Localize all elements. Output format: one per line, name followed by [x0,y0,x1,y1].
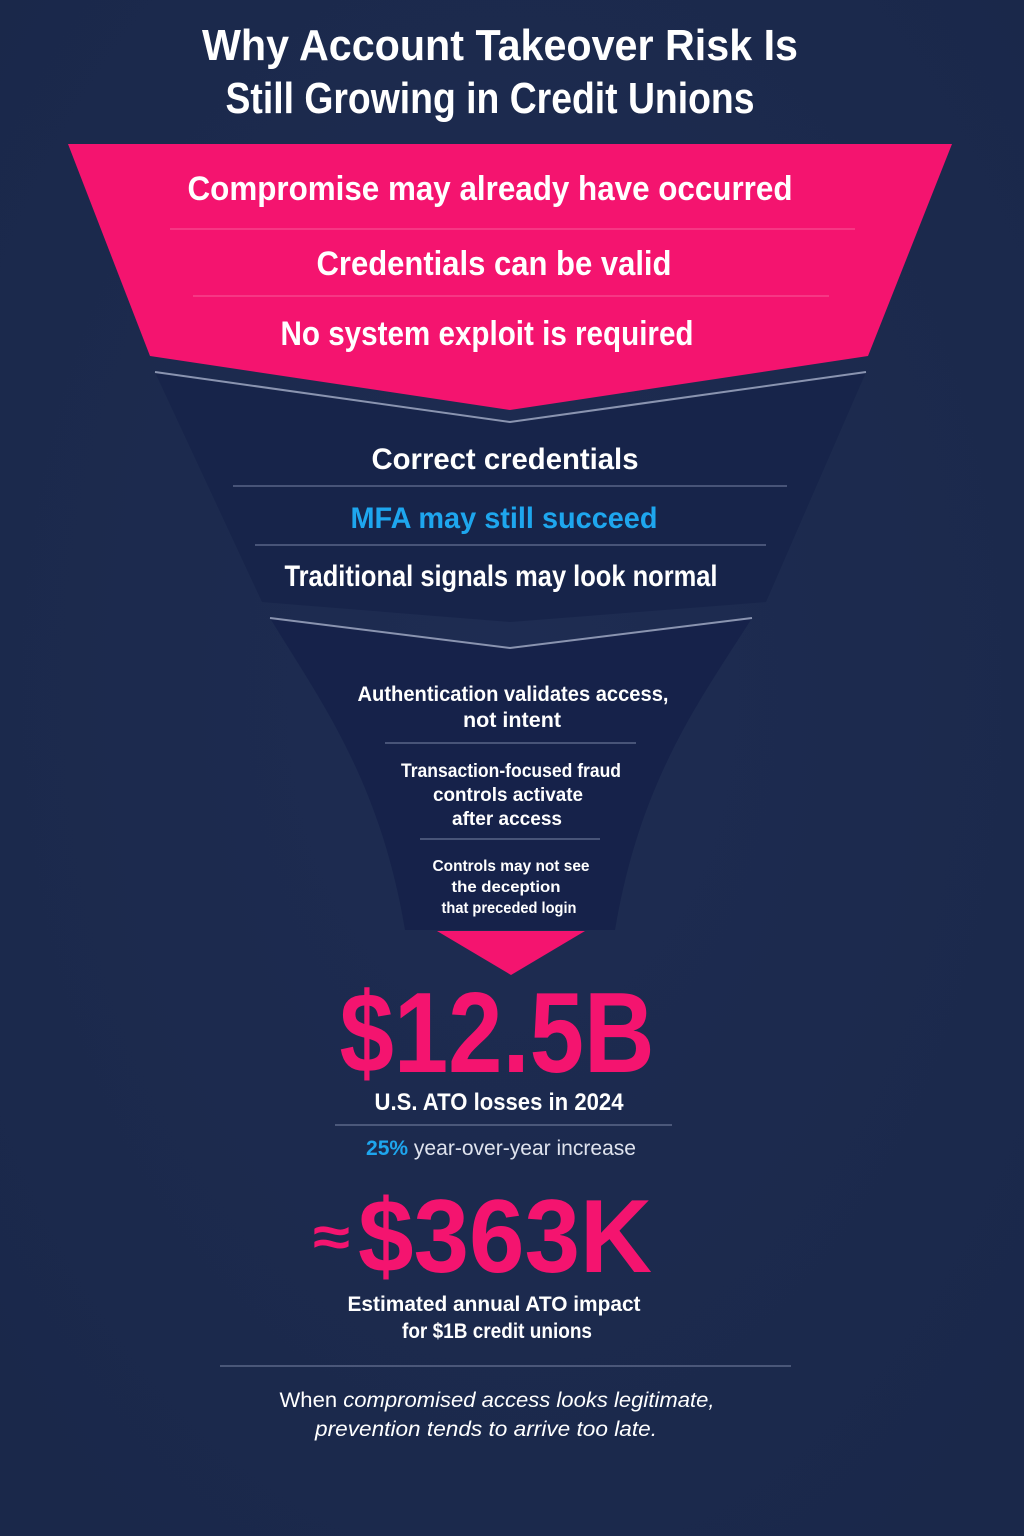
stat: $363K: for $1B credit unions [402,1320,592,1343]
text: authentication: not intent [463,709,561,732]
text: transaction controls: controls activate [433,785,583,806]
stat: $12.5B: U.S. ATO losses in 2024 [374,1089,624,1116]
funnel stage 1: pink top band: Compromise may already have occurred [188,170,792,208]
text: deception [432,858,590,917]
funnel stage 2: dark middle band: Correct credentials [372,443,638,476]
text: transaction controls: after access [452,809,562,830]
title [202,21,798,123]
stat: $363K: $363K [358,1179,652,1295]
stat: $363K [313,1179,652,1343]
funnel stage 1: pink top band [68,144,952,410]
funnel stage 3: dark bottom section [270,618,752,930]
stat: $363K: Estimated annual ATO impact [348,1293,641,1316]
text: transaction controls [401,761,621,830]
arrow: pink triangle [437,931,585,975]
stat: $363K: ≈ [313,1205,350,1268]
title: Why Account Takeover Risk Is [202,21,798,70]
stat: 25% increase: 25% year-over-year increase [366,1137,636,1160]
text: deception: that preceded login [442,900,576,917]
text: authentication [358,683,668,732]
text: transaction controls: Transaction-focused fraud [401,761,621,782]
text: authentication: Authentication validates access, [358,683,668,706]
stat: $12.5B: $12.5B [340,970,654,1097]
title: Still Growing in Credit Unions [226,74,754,123]
funnel stage 2: dark middle band [155,372,866,622]
text: deception: Controls may not see [432,858,590,875]
closing statement: When compromised access looks legitimate, [280,1389,714,1412]
funnel stage 1: pink top band: No system exploit is required [280,315,694,353]
closing statement: prevention tends to arrive too late. [314,1418,657,1441]
funnel stage 2: dark middle band: MFA may still succeed [350,502,658,535]
funnel stage 2: dark middle band: Traditional signals may look normal [284,560,718,593]
closing statement [280,1389,714,1441]
text: deception: the deception [452,879,560,896]
funnel stage 1: pink top band: Credentials can be valid [316,245,672,283]
